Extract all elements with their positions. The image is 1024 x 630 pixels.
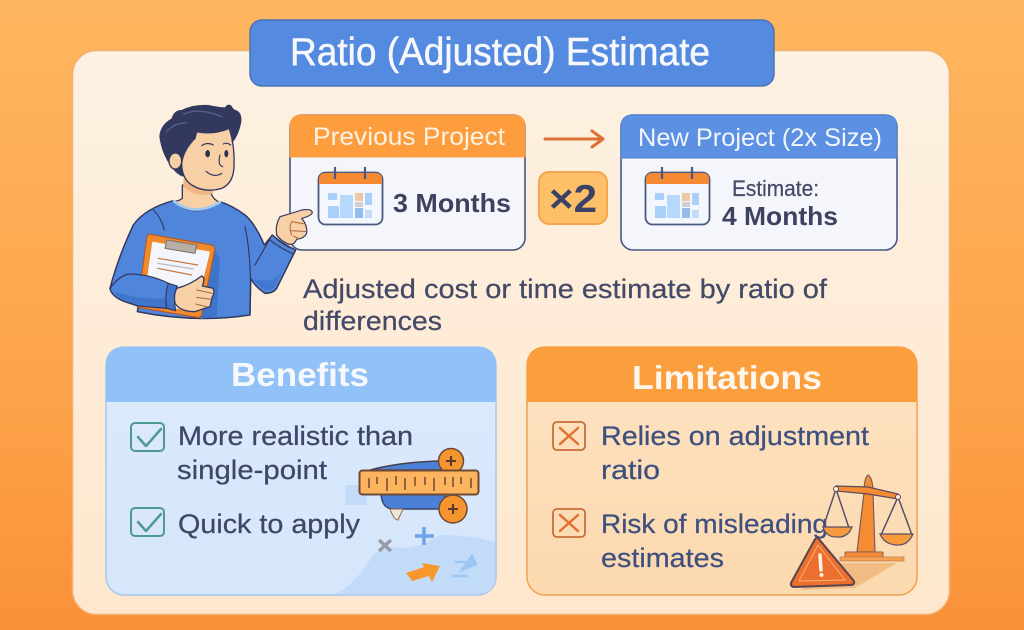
head	[159, 105, 241, 195]
collar	[174, 201, 220, 210]
icon: ruler illustration	[345, 448, 478, 582]
description text	[303, 274, 828, 336]
sleeve over clipboard	[110, 274, 168, 308]
eyes	[205, 150, 210, 157]
card: previous project	[290, 115, 525, 250]
card: new project: 4 Months	[722, 201, 838, 231]
panel: benefits	[106, 347, 496, 595]
paper	[143, 242, 210, 312]
multiplier badge	[539, 172, 607, 224]
icon: check one	[131, 423, 164, 451]
multiplier badge: ×2	[549, 178, 597, 221]
brows nose mouth	[202, 143, 231, 175]
ear	[169, 153, 182, 169]
limitation one text	[601, 421, 870, 485]
heading: limitations: Limitations	[632, 359, 822, 396]
benefit one text: single-point	[177, 455, 328, 485]
limitation one text: ratio	[601, 455, 660, 485]
card: new project	[621, 115, 897, 250]
heading: benefits: Benefits	[231, 356, 369, 393]
clip	[165, 240, 197, 253]
main card	[72, 50, 950, 614]
card: new project: Estimate:	[732, 176, 819, 201]
title	[250, 20, 774, 86]
neck	[173, 185, 220, 211]
limitation two text	[601, 509, 828, 573]
card: new project: New Project (2x Size)	[638, 124, 882, 152]
limitation two text: Risk of misleading	[601, 509, 828, 539]
hair highlight	[167, 111, 222, 132]
card: previous project: Previous Project	[313, 123, 505, 151]
description text: Adjusted cost or time estimate by ratio of	[303, 274, 828, 304]
sweater	[110, 201, 296, 318]
icon: calendar	[318, 167, 382, 224]
benefit one text: More realistic than	[178, 421, 413, 451]
icon: cross two	[553, 509, 585, 537]
cuff right	[269, 235, 296, 254]
sweater fold lines	[153, 210, 272, 313]
hand on clipboard	[174, 276, 214, 312]
hair	[159, 105, 241, 177]
arrow	[545, 131, 603, 147]
icon: check two	[131, 508, 164, 536]
clipboard shadow	[200, 250, 220, 319]
cuff	[166, 283, 177, 311]
body and arms	[110, 185, 312, 319]
panel: limitations	[527, 347, 917, 595]
sleeve shadow	[253, 272, 282, 290]
icon: cross one	[553, 422, 585, 450]
title: Ratio (Adjusted) Estimate	[290, 31, 710, 74]
person illustration	[110, 105, 312, 319]
description text: differences	[303, 306, 442, 336]
paper lines	[158, 258, 198, 275]
background wave	[335, 535, 495, 594]
benefit two text: Quick to apply	[178, 509, 361, 539]
card: previous project: 3 Months	[393, 188, 511, 218]
pointing hand	[276, 210, 312, 244]
face	[182, 128, 234, 190]
icon: balance scale with warning	[791, 475, 913, 590]
benefit one text	[177, 421, 413, 485]
neck shade	[183, 178, 213, 195]
clipboard	[137, 234, 215, 318]
limitation two text: estimates	[601, 543, 724, 573]
limitation one text: Relies on adjustment	[601, 421, 870, 451]
icon: calendar	[646, 167, 710, 224]
